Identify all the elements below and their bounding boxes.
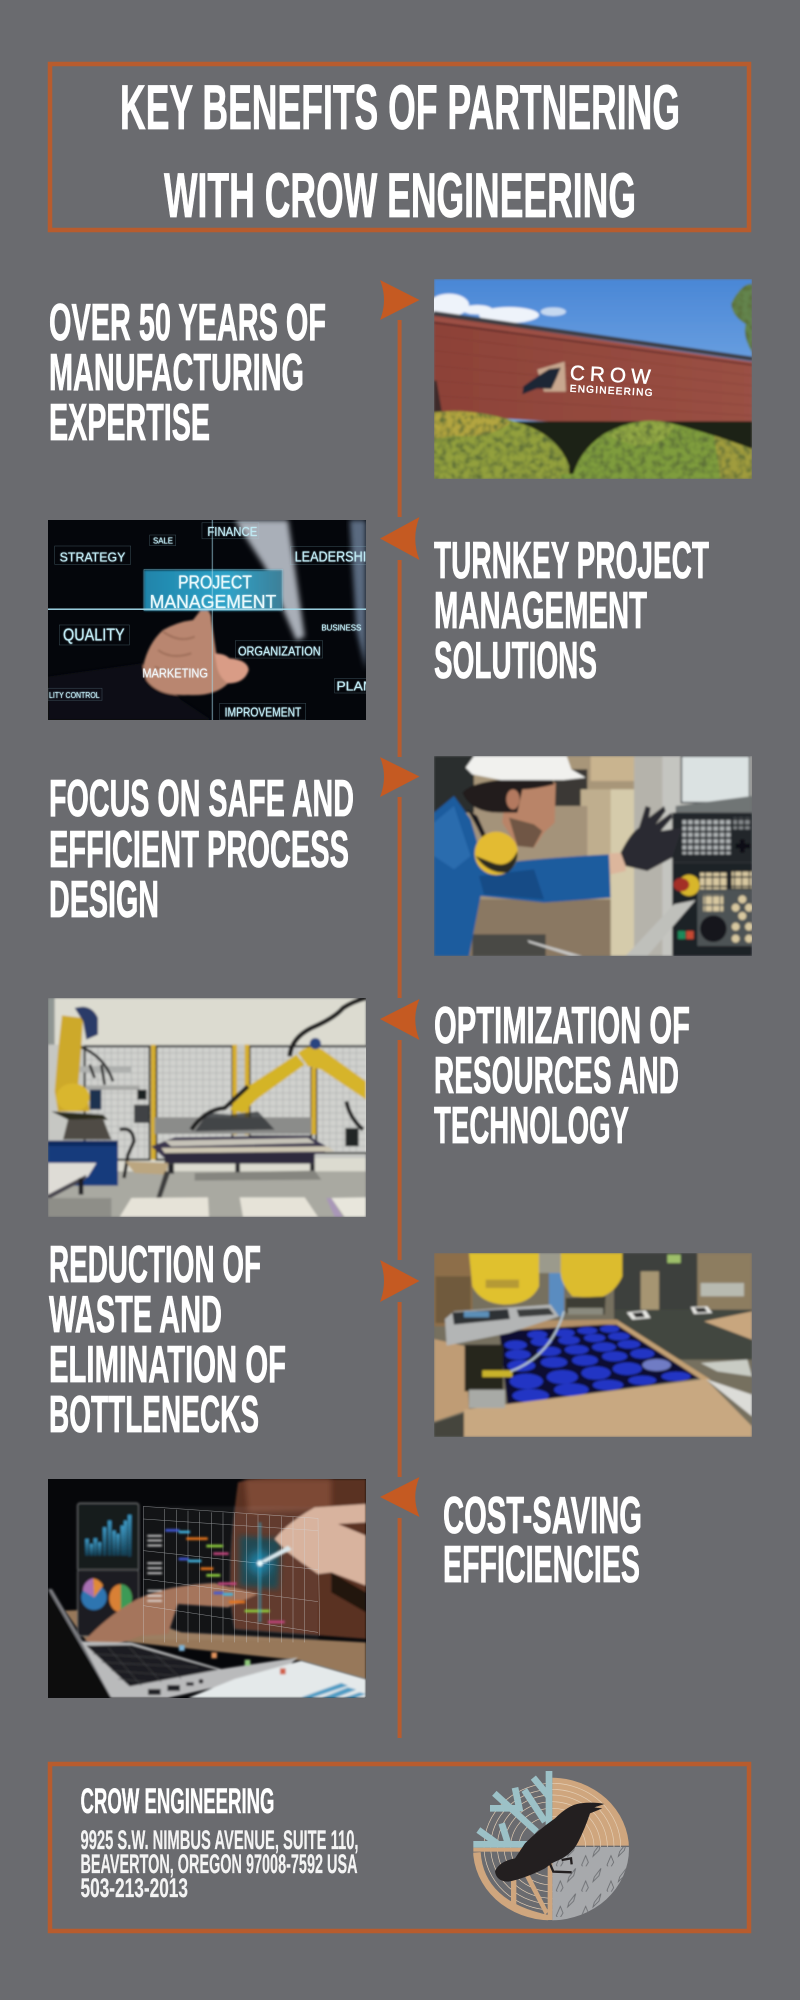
arrow 2: [380, 517, 420, 560]
benefit 2 text: [434, 532, 709, 690]
left robot: [55, 1015, 90, 1111]
laptop: [48, 1589, 113, 1698]
glowing keywords: QUALITY: [63, 625, 125, 645]
clouds: [429, 294, 566, 323]
arrow 3: [380, 757, 420, 797]
gantt bars: [165, 1529, 285, 1623]
benefit 1 text: MANUFACTURING: [49, 344, 304, 402]
benefit 5 text: REDUCTION OF: [49, 1236, 261, 1294]
shelves and equipment: [76, 1066, 131, 1072]
glowing keywords: PROJECT: [178, 572, 252, 593]
glowing keywords: PLAN: [336, 679, 373, 694]
address: 9925 S.W. NIMBUS AVENUE, SUITE 110,: [80, 1825, 358, 1855]
glove: [621, 806, 682, 871]
snowflake: [473, 1771, 549, 1845]
arrow 5: [380, 1260, 420, 1302]
benefit 6 text: [443, 1487, 642, 1594]
cardboard flaps: [434, 1339, 469, 1421]
table: [65, 1609, 366, 1679]
arrow 4: [380, 999, 420, 1040]
benefit 1 text: [49, 294, 326, 452]
address: BEAVERTON, OREGON 97008-7592 USA: [80, 1849, 358, 1879]
yellow robot arms: [469, 1253, 539, 1305]
neck and face: [502, 783, 556, 848]
photo: robot packing blue bottles: [434, 1253, 752, 1437]
glowing keywords: ORGANIZATION: [238, 643, 321, 658]
left table: [48, 1163, 96, 1198]
benefit 1 text: OVER 50 YEARS OF: [49, 294, 326, 352]
keypad: [672, 813, 752, 863]
guide lines: [48, 520, 371, 720]
tablet: [626, 900, 696, 956]
benefit 3 text: [49, 770, 354, 929]
sign lettering: CROW: [569, 362, 652, 389]
hair: [462, 778, 554, 813]
glowing keywords: MARKETING: [142, 666, 208, 681]
hard hat: [466, 756, 586, 780]
glowing keywords: [49, 524, 375, 720]
benefit 2 text: SOLUTIONS: [434, 632, 597, 690]
benefit 3 text: FOCUS ON SAFE AND: [49, 770, 354, 828]
truss struts: [473, 1848, 552, 1920]
hand: [141, 610, 230, 698]
highlighted box: [144, 570, 282, 611]
glowing keywords: BUSINESS: [321, 622, 362, 632]
benefit 4 text: [434, 997, 690, 1155]
benefit 5 text: WASTE AND: [49, 1286, 222, 1344]
truss arc: [477, 1852, 548, 1919]
photo: laptop with gantt chart: [48, 1478, 366, 1698]
machine column: [634, 756, 664, 956]
sign: [537, 362, 566, 392]
legend chips: [179, 1645, 185, 1651]
glowing keywords: SALE: [153, 536, 173, 546]
footer panel: [50, 1764, 749, 1931]
hands: [85, 1583, 258, 1646]
blue base: [48, 1141, 118, 1186]
glowing keywords: MANAGEMENT: [150, 591, 276, 612]
person blurred: [230, 1478, 366, 1639]
right robot: [230, 1055, 305, 1113]
company name: CROW ENGINEERING: [80, 1782, 274, 1821]
title text: [120, 73, 680, 231]
paper: [188, 1661, 366, 1698]
floor sheets: [120, 1197, 209, 1217]
timeline: [380, 280, 420, 1738]
title box: [50, 64, 749, 231]
chart panels: [77, 1503, 139, 1571]
pie charts: [81, 1585, 107, 1610]
address: [80, 1825, 358, 1903]
glowing keywords: STRATEGY: [60, 549, 125, 564]
gripper and table: [195, 1111, 275, 1131]
benefit 3 text: EFFICIENT PROCESS: [49, 821, 349, 879]
benefit 5 text: [49, 1236, 286, 1444]
glowing keywords: LITY CONTROL: [49, 690, 100, 700]
box interior and bottles: [499, 1321, 701, 1405]
photo: project management: [48, 520, 375, 720]
logo: [473, 1771, 632, 1922]
photo: Crow Engineering building: [429, 279, 752, 479]
wood rings: [552, 1775, 632, 1846]
sign lettering: ENGINEERING: [570, 384, 653, 399]
glowing keywords: LEADERSHIP: [295, 550, 375, 566]
markers: [627, 1310, 651, 1320]
address: 503-213-2013: [80, 1873, 188, 1903]
benefit 4 text: TECHNOLOGY: [434, 1097, 629, 1155]
sign lettering: [570, 365, 652, 396]
diamond plate: [552, 1847, 632, 1922]
glowing keywords: FINANCE: [207, 524, 257, 539]
benefit 5 text: ELIMINATION OF: [49, 1336, 286, 1394]
photo: robot arm cell: [48, 998, 370, 1217]
photo: technician at control panel: [434, 756, 753, 956]
shrubs: [434, 411, 752, 479]
benefit 5 text: BOTTLENECKS: [49, 1386, 259, 1444]
stylus spark: [248, 1551, 272, 1575]
benefit 3 text: DESIGN: [49, 871, 159, 929]
worker arm and jacket: [434, 796, 611, 956]
benefit 6 text: COST-SAVING: [443, 1487, 642, 1545]
ear defenders: [468, 810, 486, 838]
arrow 1: [380, 280, 420, 320]
gripper: [445, 1305, 559, 1346]
gantt grid: [143, 1506, 320, 1642]
benefit 1 text: EXPERTISE: [49, 394, 210, 452]
crow: [495, 1803, 604, 1882]
fence panels: [85, 1046, 370, 1160]
glowing keywords: IMPROVEMENT: [225, 706, 302, 720]
benefit 6 text: EFFICIENCIES: [443, 1536, 640, 1594]
arrow 6: [380, 1477, 420, 1517]
